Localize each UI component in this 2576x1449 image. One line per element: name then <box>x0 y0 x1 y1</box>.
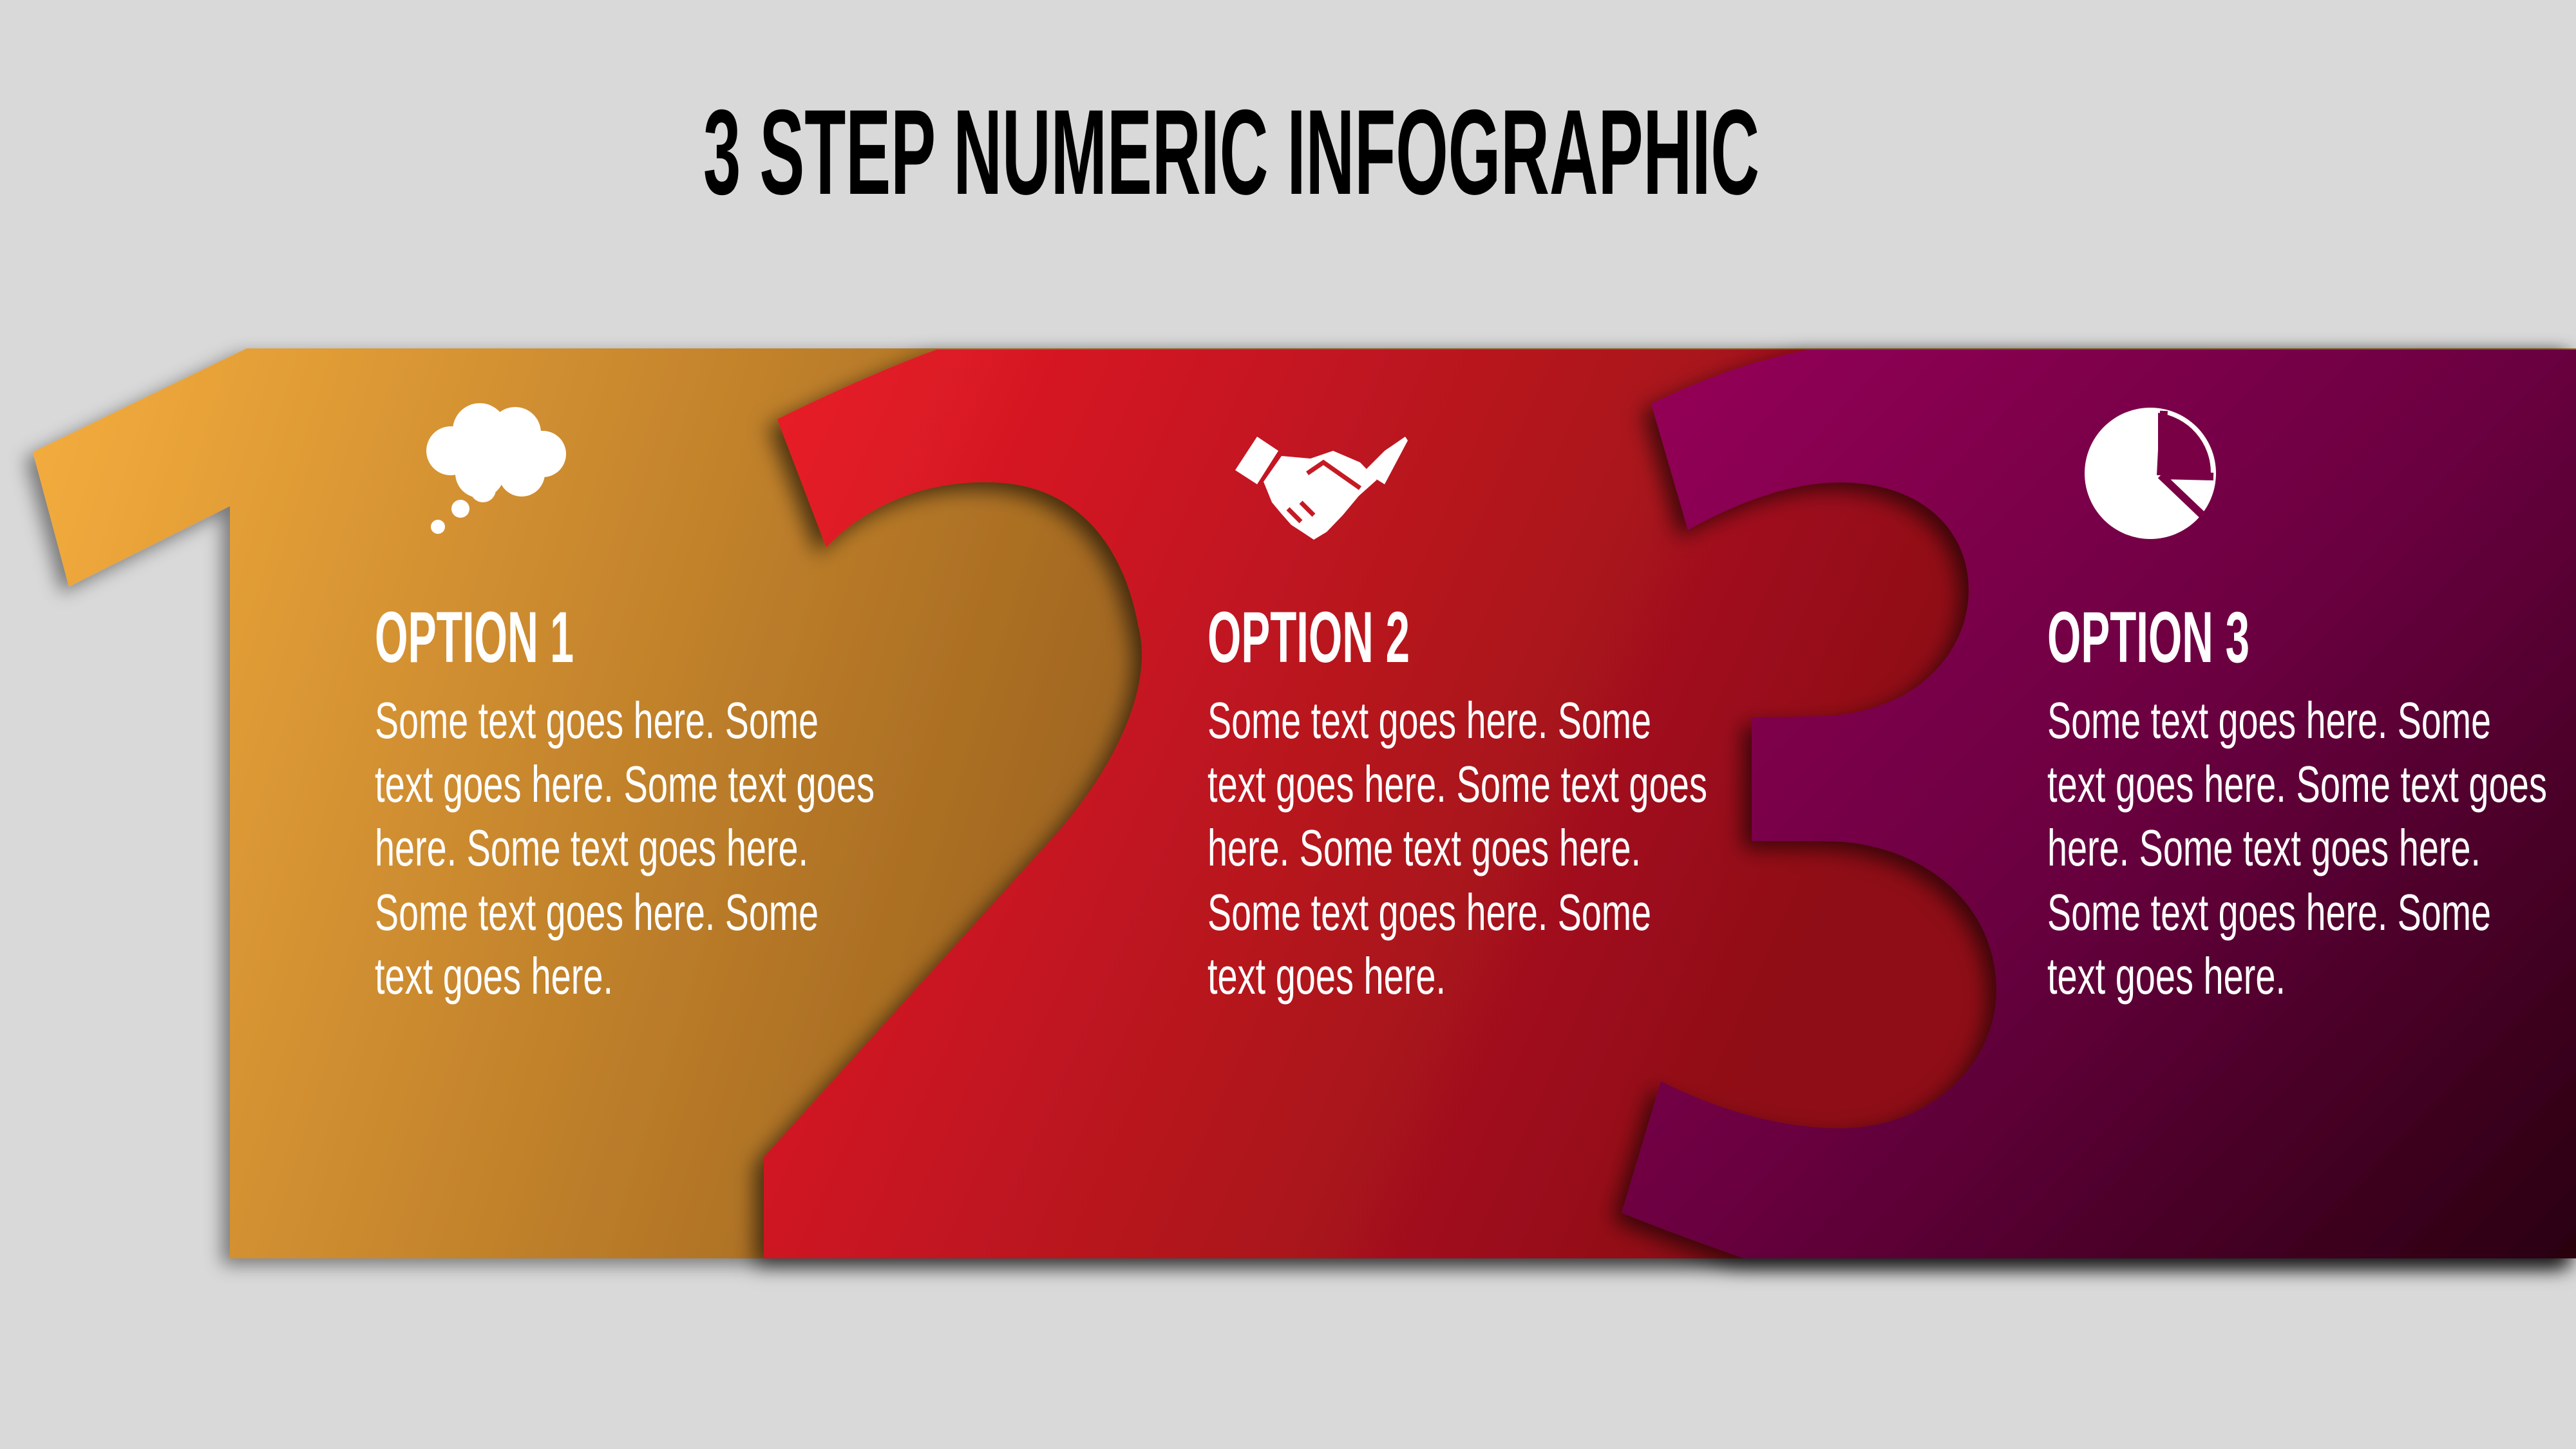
text block: option 2: Some text goes here. Some <box>1208 884 1651 941</box>
text block: option 2: OPTION 2 <box>1208 597 1410 677</box>
icon: pie chart <box>2085 408 2216 539</box>
title: 3 STEP NUMERIC INFOGRAPHIC <box>703 84 1759 220</box>
text block: option 1: text goes here. Some text goes <box>375 755 875 813</box>
text block: option 1 <box>375 597 875 1005</box>
text block: option 3 <box>2047 597 2547 1005</box>
panel: step 1 (orange numeral 1) <box>33 348 2576 1258</box>
text block: option 2 <box>1208 597 1707 1005</box>
text block: option 2: here. Some text goes here. <box>1208 819 1641 876</box>
text block: option 1: here. Some text goes here. <box>375 819 808 876</box>
text block: option 3: text goes here. <box>2047 947 2286 1005</box>
text block: option 1: Some text goes here. Some <box>375 692 819 749</box>
text block: option 1: text goes here. <box>375 947 613 1005</box>
icon: thought cloud <box>426 403 566 534</box>
icon: handshake <box>1235 437 1408 540</box>
panel: step 3 (purple numeral 3) <box>1622 350 2576 1258</box>
text block: option 1: Some text goes here. Some <box>375 884 819 941</box>
text block: option 1: OPTION 1 <box>375 597 574 677</box>
panel: step 2 (red numeral 2) <box>764 350 2576 1258</box>
text block: option 2: text goes here. Some text goes <box>1208 755 1707 813</box>
text block: option 2: Some text goes here. Some <box>1208 692 1651 749</box>
text block: option 3: OPTION 3 <box>2047 597 2249 677</box>
text block: option 2: text goes here. <box>1208 947 1446 1005</box>
